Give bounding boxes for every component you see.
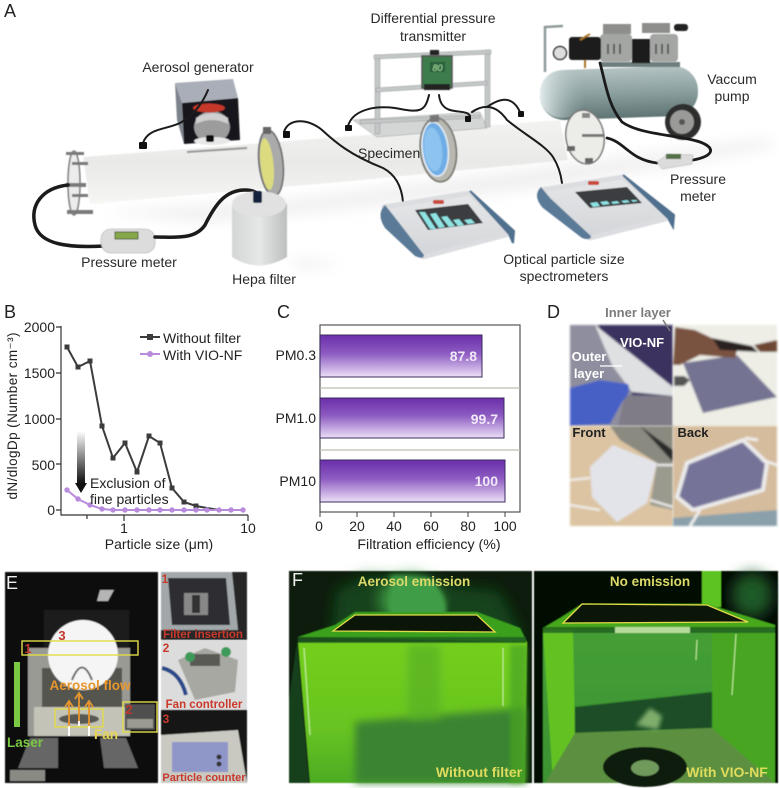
photo: layers bbox=[570, 325, 673, 426]
differential pressure transmitter: 80 bbox=[432, 63, 443, 73]
y tick labels: 1000 bbox=[24, 411, 55, 427]
label: pressure meter right: Pressure bbox=[670, 171, 726, 187]
label: VIO-NF: VIO-NF bbox=[620, 335, 664, 350]
bar values bbox=[450, 348, 498, 489]
y tick labels: 2000 bbox=[24, 319, 55, 335]
bar values: 87.8 bbox=[450, 348, 477, 364]
x tick labels: 60 bbox=[423, 518, 439, 534]
hose to right pressure meter bbox=[607, 138, 657, 163]
flow arrows bbox=[65, 693, 93, 736]
bar PM0.3 bbox=[320, 335, 482, 377]
differential pressure transmitter bbox=[422, 50, 452, 90]
labels on main photo: Fan bbox=[94, 727, 118, 742]
inset 2: fan controller bbox=[161, 640, 247, 711]
x tick labels bbox=[315, 518, 517, 534]
category labels: PM0.3 bbox=[276, 347, 316, 363]
label: pressure meter left: Pressure meter bbox=[81, 254, 177, 270]
inset 3: particle counter: Particle counter bbox=[162, 772, 246, 784]
inset 1: filter insertion: Filter insertion bbox=[163, 629, 243, 641]
panel letter B: B bbox=[4, 302, 16, 322]
annotation: exclusion of fine particles: fine particles bbox=[90, 491, 169, 507]
device in box 2 bbox=[125, 704, 155, 730]
series: with VIO-NF bbox=[64, 487, 246, 513]
panel letter A: A bbox=[4, 1, 16, 21]
category labels bbox=[276, 347, 316, 489]
axis break lines bbox=[320, 388, 520, 450]
annotation: exclusion of fine particles: Exclusion of bbox=[90, 475, 166, 491]
panel C: filtration efficiency bars bbox=[276, 302, 520, 553]
x tick labels: 80 bbox=[460, 518, 476, 534]
Hepa filter cylinder bbox=[232, 191, 287, 266]
label: outer layer: layer bbox=[574, 366, 604, 381]
connector cables bbox=[143, 90, 562, 202]
label: vacuum pump: pump bbox=[714, 88, 750, 104]
x tick labels bbox=[120, 520, 256, 536]
aerosol generator box bbox=[175, 79, 247, 152]
leader: inner layer bbox=[663, 320, 670, 331]
gradient arrow bbox=[75, 431, 87, 493]
x ticks bbox=[320, 512, 505, 517]
left end flange with bolts bbox=[66, 151, 93, 215]
pressure meter right bbox=[657, 154, 693, 169]
label: pressure meter right: meter bbox=[680, 188, 716, 204]
pump wheel bbox=[665, 104, 701, 140]
label: spectrometers: Optical particle size bbox=[503, 251, 625, 267]
label: no emission: No emission bbox=[610, 574, 690, 589]
inset 2: fan controller: 2 bbox=[163, 641, 170, 655]
specimen holder bbox=[417, 113, 460, 184]
labels on main photo: 1 bbox=[24, 641, 32, 656]
end window flange bbox=[562, 108, 608, 166]
x tick labels: 1 bbox=[120, 520, 128, 536]
inset 3: particle counter bbox=[161, 710, 247, 784]
category labels: PM1.0 bbox=[276, 410, 316, 426]
panel letter E: E bbox=[6, 573, 18, 593]
y tick labels bbox=[24, 319, 55, 518]
label: specimen: Specimen bbox=[358, 145, 420, 161]
bar values: 99.7 bbox=[471, 411, 498, 427]
panel letter C: C bbox=[277, 302, 290, 322]
panel letter F: F bbox=[292, 570, 303, 590]
photo: mask front bbox=[570, 426, 673, 526]
labels on main photo: Aerosol flow bbox=[49, 678, 131, 693]
y tick labels: 0 bbox=[47, 502, 55, 518]
y axis title: dN/dlogDp (Number cm⁻³) bbox=[5, 332, 20, 500]
legend: Without filter bbox=[163, 330, 241, 346]
x tick labels: 20 bbox=[349, 518, 365, 534]
x tick labels: 10 bbox=[240, 520, 256, 536]
series: without filter bbox=[64, 344, 243, 510]
y tick labels: 1500 bbox=[24, 365, 55, 381]
left photo: without filter bbox=[289, 570, 532, 783]
bar values: 100 bbox=[475, 473, 498, 489]
test tube bbox=[83, 120, 568, 204]
labels on main photo: 3 bbox=[58, 628, 66, 643]
x tick labels: 40 bbox=[386, 518, 402, 534]
particle spectrometer 2 bbox=[537, 175, 674, 239]
floor shadow bbox=[100, 138, 770, 272]
label: without filter: Without filter bbox=[436, 764, 523, 780]
leader: outer layer bbox=[600, 365, 622, 367]
label: front: Front bbox=[572, 425, 606, 440]
photo: mask back bbox=[673, 426, 777, 526]
pump hoses bbox=[600, 63, 711, 160]
label: differential pressure transmitter: transmitter bbox=[400, 28, 466, 44]
x axis title: Particle size (μm) bbox=[105, 536, 213, 552]
labels on main photo: Laser bbox=[7, 735, 44, 750]
panel D: mask photos bbox=[547, 302, 777, 526]
labels on main photo bbox=[7, 628, 133, 750]
laser bar bbox=[14, 662, 20, 727]
main photo bbox=[5, 572, 158, 783]
panel E: aerosol flow setup bbox=[5, 572, 247, 784]
panel F: laser visualization bbox=[289, 570, 778, 787]
vacuum pump tank bbox=[539, 26, 699, 121]
labels on main photo: 2 bbox=[125, 702, 133, 717]
x axis title: Filtration efficiency (%) bbox=[357, 537, 501, 553]
label: differential pressure transmitter: Differential pressure bbox=[370, 10, 496, 26]
pressure meter left bbox=[101, 229, 155, 253]
label: aerosol emission: Aerosol emission bbox=[358, 574, 470, 589]
label: aerosol generator: Aerosol generator bbox=[142, 59, 254, 75]
panel letter D: D bbox=[547, 302, 560, 322]
tube connectors bbox=[139, 111, 524, 149]
panel B: particle size chart bbox=[4, 302, 256, 552]
axes bbox=[56, 326, 248, 521]
x tick labels: 100 bbox=[493, 518, 517, 534]
category labels: PM10 bbox=[279, 473, 316, 489]
x tick labels: 0 bbox=[315, 518, 323, 534]
inset 1: filter insertion: 1 bbox=[162, 572, 169, 586]
particle spectrometer 1 bbox=[380, 191, 514, 258]
hose to Hepa filter bbox=[155, 190, 260, 237]
highlight region bbox=[563, 604, 748, 623]
label: vacuum pump: Vaccum bbox=[707, 71, 757, 87]
label: with VIO-NF: With VIO-NF bbox=[686, 764, 768, 780]
inset 1: filter insertion bbox=[161, 572, 247, 641]
highlight boxes bbox=[22, 641, 157, 732]
bar PM1.0 bbox=[320, 398, 504, 438]
inset 3: particle counter: 3 bbox=[163, 712, 170, 726]
panel A: aerosol test apparatus bbox=[4, 1, 770, 287]
right photo: with VIO-NF bbox=[534, 571, 778, 787]
differential pressure frame bbox=[353, 50, 491, 137]
label: inner layer: Inner layer bbox=[605, 305, 671, 320]
left hose bbox=[34, 185, 104, 247]
label: spectrometers: spectrometers bbox=[520, 268, 608, 284]
legend bbox=[140, 330, 242, 363]
label: outer layer: Outer bbox=[572, 349, 606, 364]
y tick labels: 500 bbox=[32, 457, 55, 473]
bar PM10 bbox=[320, 460, 505, 502]
Hepa filter ring bbox=[256, 127, 286, 197]
label: Hepa filter: Hepa filter bbox=[232, 271, 296, 287]
plot frame bbox=[320, 325, 520, 512]
legend: With VIO-NF bbox=[163, 347, 242, 363]
label: back: Back bbox=[677, 425, 709, 440]
pump motor bbox=[554, 23, 688, 68]
photo: cutting bbox=[673, 325, 777, 426]
inset 2: fan controller: Fan controller bbox=[166, 699, 243, 711]
highlight region bbox=[333, 615, 495, 632]
